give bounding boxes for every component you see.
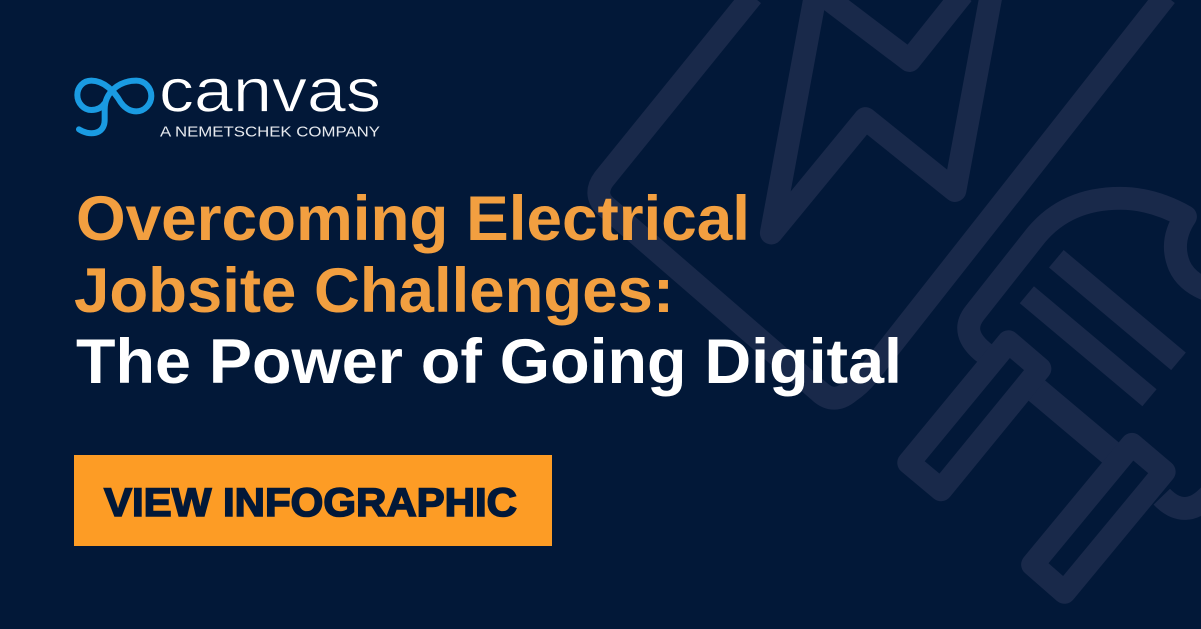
title line 2: Jobsite Challenges: <box>74 256 674 326</box>
button: view infographic: VIEW INFOGRAPHIC <box>104 481 517 525</box>
button: view infographic <box>74 455 552 546</box>
title line 3: The Power of Going Digital <box>76 327 902 397</box>
logo wordmark: canvas <box>159 56 381 124</box>
icon: plug prong lower <box>1027 295 1149 398</box>
title line 1: Overcoming Electrical <box>76 184 750 254</box>
icon: plug neck <box>1034 388 1114 456</box>
icon: plug lower ridge <box>1162 495 1201 508</box>
icon: plug body <box>969 198 1201 354</box>
icon: lightning bolt <box>771 0 993 233</box>
icon: plug cord clamp left <box>909 342 1040 490</box>
icon: plug prong upper <box>1056 259 1179 361</box>
logo tagline: A NEMETSCHEK COMPANY <box>160 124 380 140</box>
logo: GoCanvas <box>77 56 381 140</box>
icon: outer diamond outline <box>599 0 1166 398</box>
icon: background electrical plug and lightning bolt <box>599 0 1201 592</box>
title <box>74 184 902 397</box>
icon: plug cord clamp right <box>1033 444 1164 592</box>
icon: go infinity mark <box>77 81 151 133</box>
